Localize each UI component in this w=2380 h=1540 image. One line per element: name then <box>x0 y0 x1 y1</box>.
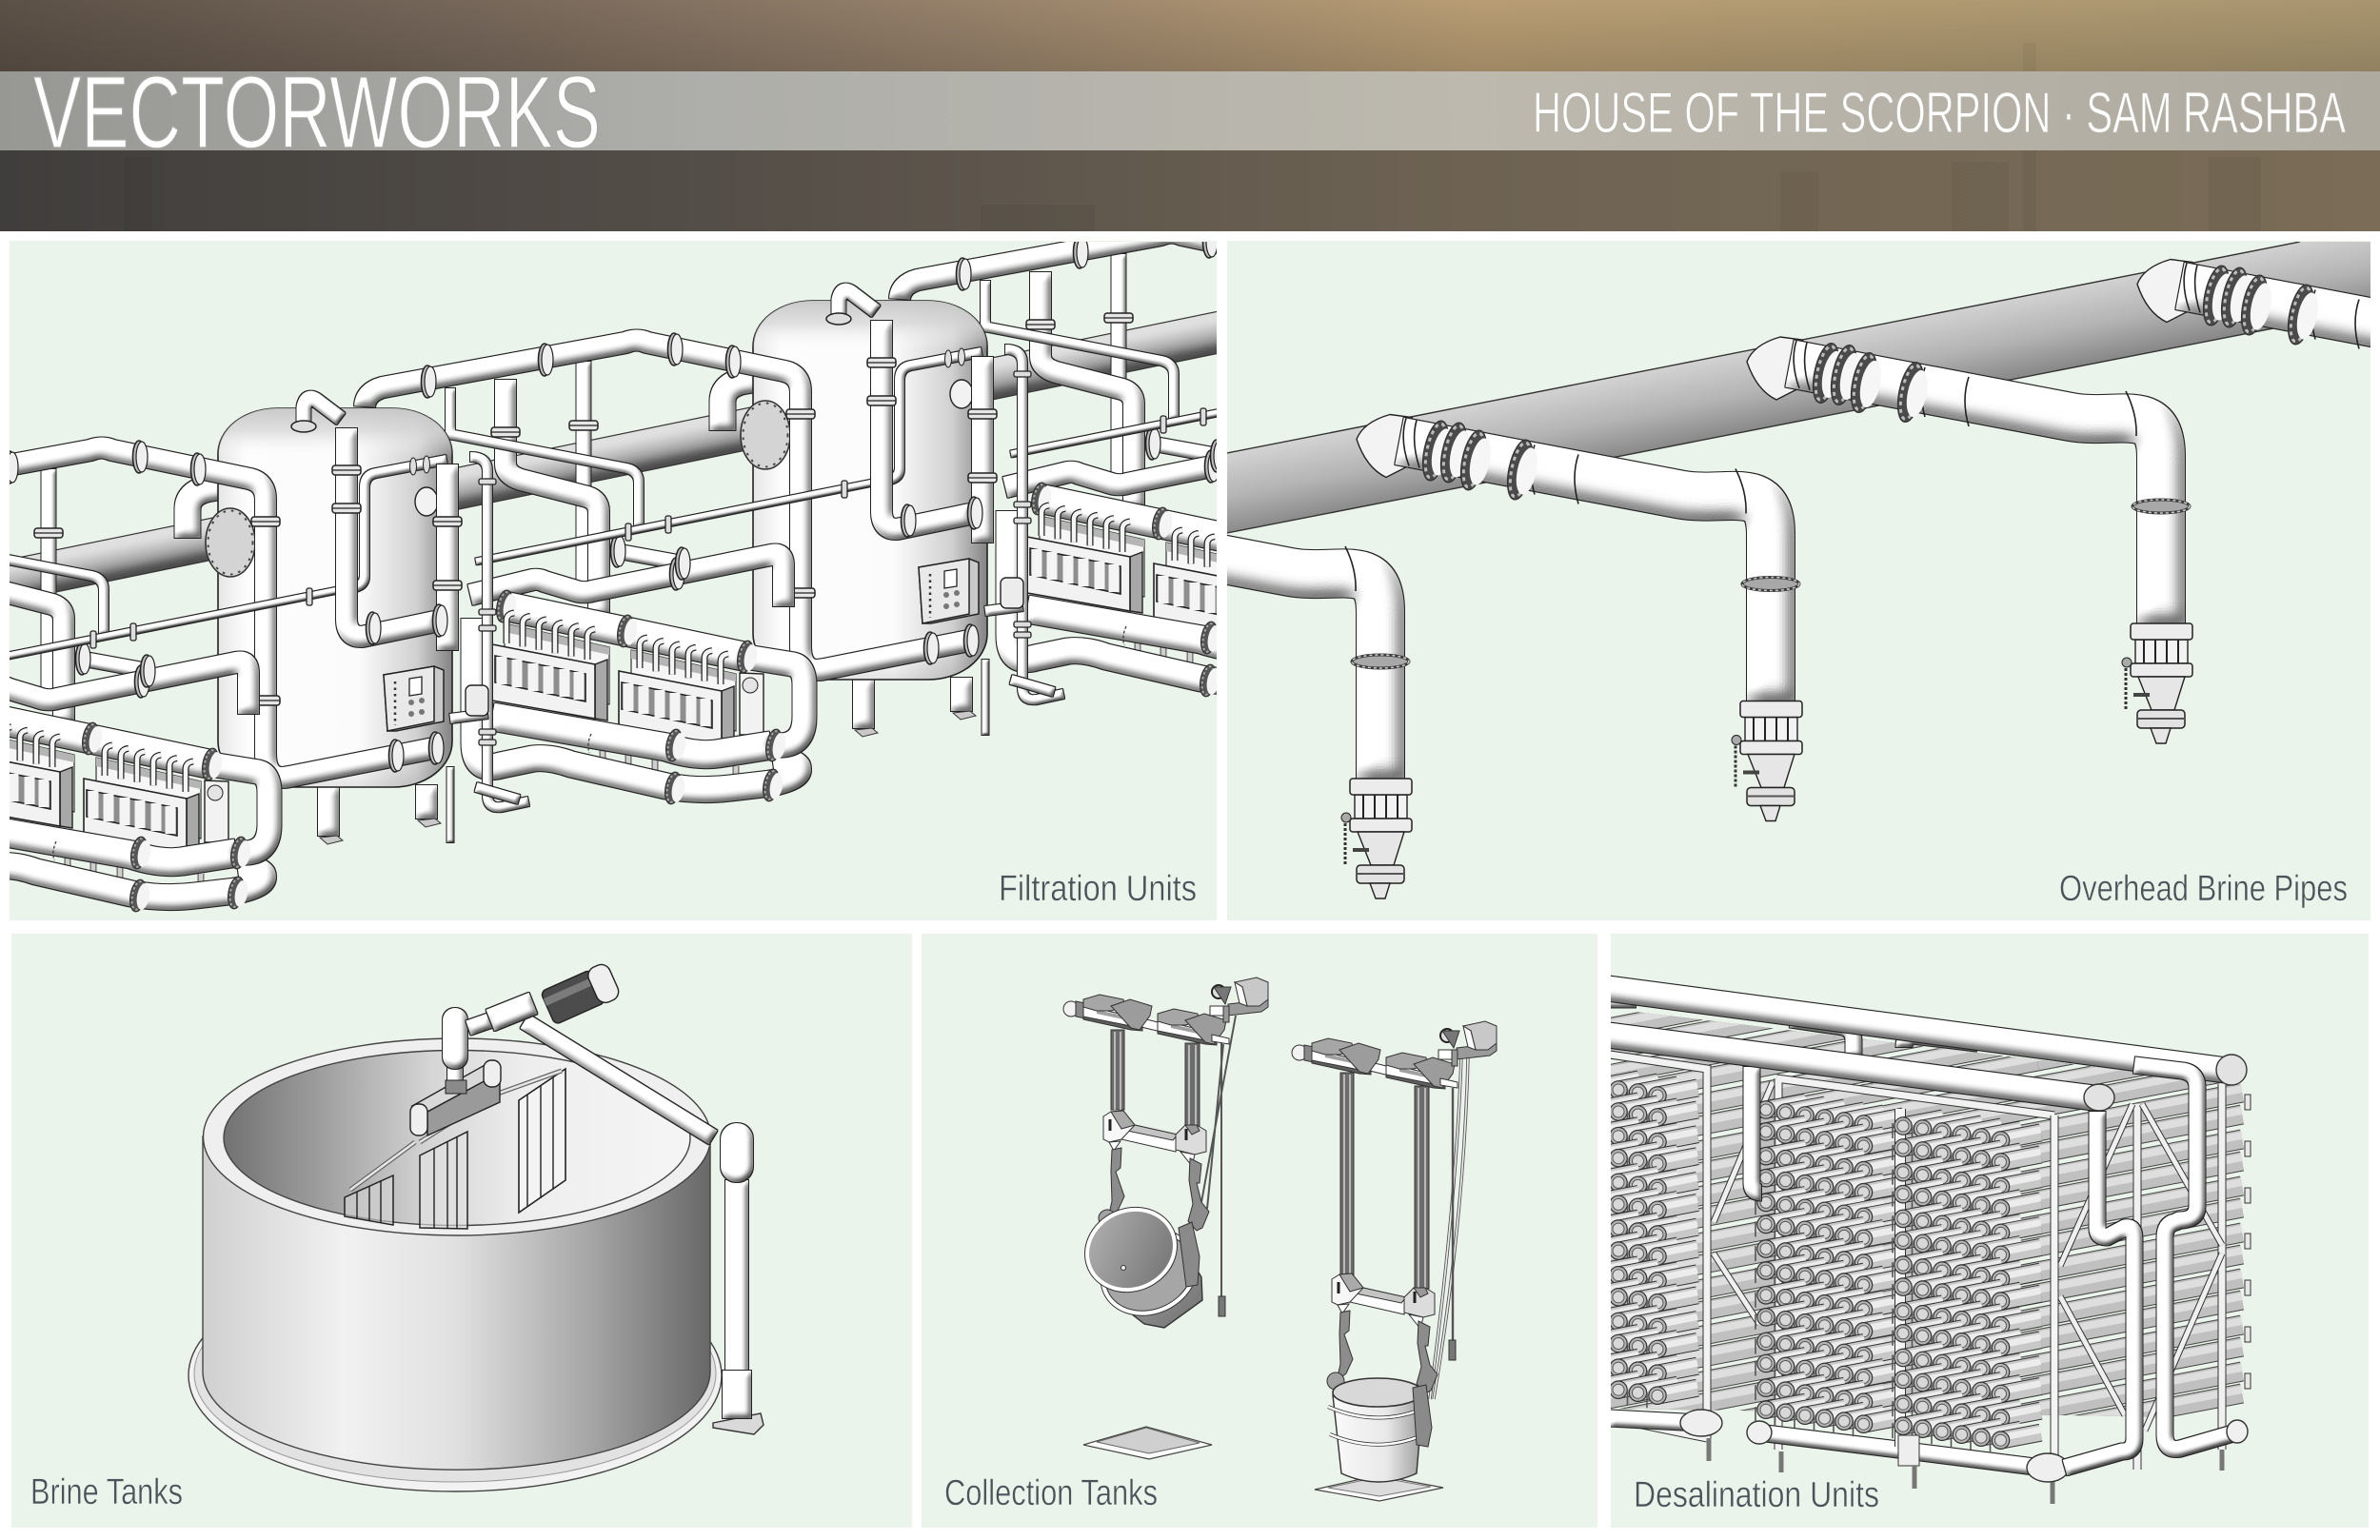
panel: collection tanks <box>922 934 1597 1528</box>
agitator paddles <box>345 1069 565 1229</box>
caption: filtration units: Filtration Units <box>999 869 1197 909</box>
caption: collection tanks: Collection Tanks <box>944 1473 1158 1513</box>
panel: desalination units <box>1611 934 2369 1528</box>
caption: desalination units: Desalination Units <box>1634 1475 1879 1515</box>
filtration plant drawing <box>0 183 1874 952</box>
desalination rack drawing <box>1611 975 2251 1504</box>
right ladle assembly <box>1292 1021 1497 1501</box>
empty pad <box>1083 1427 1212 1459</box>
header banner <box>0 0 2380 231</box>
drive shaft and motor <box>446 961 622 1094</box>
left ladle assembly <box>1063 977 1268 1328</box>
title: VECTORWORKS <box>33 54 601 169</box>
tank interior <box>224 1051 690 1226</box>
panel: filtration units <box>10 241 1217 920</box>
agitator beam <box>410 1060 501 1135</box>
brine pipe drawing <box>966 242 2380 898</box>
caption: brine tanks: Brine Tanks <box>30 1472 183 1512</box>
panel: overhead brine pipes <box>1227 241 2370 920</box>
support arm and column <box>525 1021 764 1434</box>
tank base ring <box>188 1259 722 1491</box>
panel: brine tanks <box>11 934 912 1528</box>
tank rim <box>204 1038 710 1235</box>
tank wall <box>203 1136 710 1470</box>
